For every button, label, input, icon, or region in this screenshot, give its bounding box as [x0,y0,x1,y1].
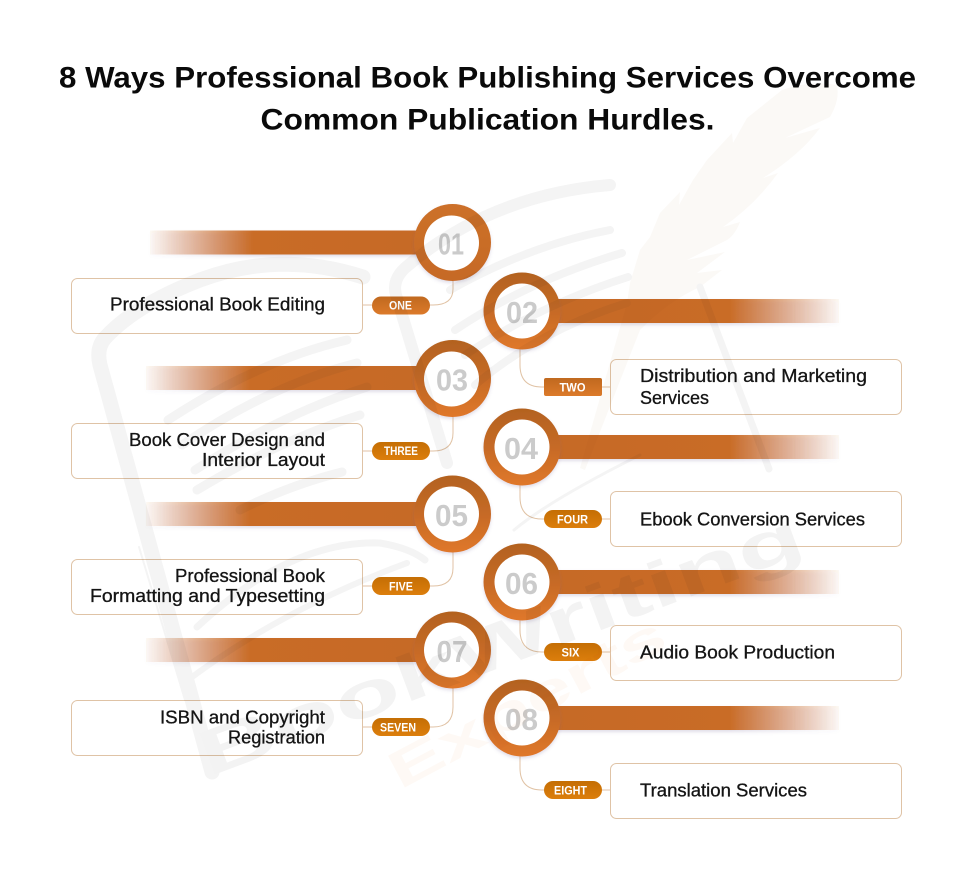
ring 01 [414,204,491,281]
pill: three [372,442,430,460]
connector 05 [363,551,453,586]
watermark: book writing experts logo [99,83,838,801]
step 01 [72,204,491,334]
pill: three: THREE [384,446,418,458]
text box 06: Audio Book Production [640,642,835,662]
ring 04 [484,408,560,486]
step 02 [484,272,902,414]
ring 08 [484,680,560,756]
bar 06 [550,570,839,594]
text box 03: Book Cover Design and [129,430,325,450]
ring 08: 08 [505,702,538,737]
text box 07 [72,700,362,756]
pill: six: SIX [562,648,580,660]
connector 07 [363,688,453,727]
connector 06 [520,618,610,652]
bar 05 [146,502,425,526]
title [59,62,916,136]
pill: four: FOUR [557,514,589,526]
step 07 [72,612,491,756]
step 08 [484,680,902,818]
text box 05: Professional Book [175,566,326,586]
pill: seven [372,718,430,736]
text box 04: Ebook Conversion Services [640,510,865,530]
bar 07 [146,638,425,662]
ring 05 [414,476,491,552]
ring 01: 01 [438,226,464,262]
text box 08 [610,764,902,818]
bar 08 [550,706,839,730]
text box 07: ISBN and Copyright [160,708,325,728]
watermark: experts text: Experts [378,606,676,801]
ring 07: 07 [436,634,468,669]
pill: six [544,643,602,661]
pill: five: FIVE [389,582,413,594]
text box 03 [72,424,362,478]
bar 01 [150,230,425,254]
title: Common Publication Hurdles. [260,104,714,136]
ring 02 [484,272,560,350]
step 03 [72,340,491,478]
watermark: open book outline [99,184,769,772]
text box 05: Formatting and Typesetting [90,586,325,606]
pill: four [544,510,602,528]
connector 01 [363,280,453,305]
title: 8 Ways Professional Book Publishing Services Overcome [59,62,916,94]
text box 08: Translation Services [640,780,807,800]
connector 02 [520,348,610,387]
step 05 [72,476,491,614]
pill: one [372,296,430,314]
ring 07 [414,612,491,688]
text box 07: Registration [228,728,325,748]
bar 03 [146,366,425,390]
ring 06: 06 [505,566,538,601]
pill: seven: SEVEN [380,722,416,734]
ring 03: 03 [436,362,468,398]
text box 02 [610,360,902,414]
pill: five [372,577,430,595]
text box 02: Distribution and Marketing [640,366,867,386]
pill: eight [544,781,602,799]
pill: two [544,378,602,396]
text box 02: Services [640,388,709,408]
text box 05 [72,560,362,614]
step 04 [484,408,902,546]
step 06 [484,544,902,680]
bar 04 [550,435,839,459]
text box 04 [610,492,902,546]
ring 06 [484,544,560,620]
connector 03 [363,416,453,451]
text box 03: Interior Layout [202,450,325,470]
watermark: feather [580,83,838,470]
connector 08 [520,755,610,790]
ring 05: 05 [435,498,468,533]
bar 02 [550,299,839,323]
pill: two: TWO [560,382,586,394]
ring 03 [414,340,491,417]
ring 04: 04 [504,431,539,466]
connector 04 [520,484,610,519]
text box 06 [610,626,902,680]
ring 02: 02 [506,295,538,330]
pill: one: ONE [389,300,412,312]
pill: eight: EIGHT [554,786,587,798]
watermark: brand text: BookWriting [188,499,812,790]
text box 01: Professional Book Editing [110,294,325,314]
text box 01 [72,278,362,334]
